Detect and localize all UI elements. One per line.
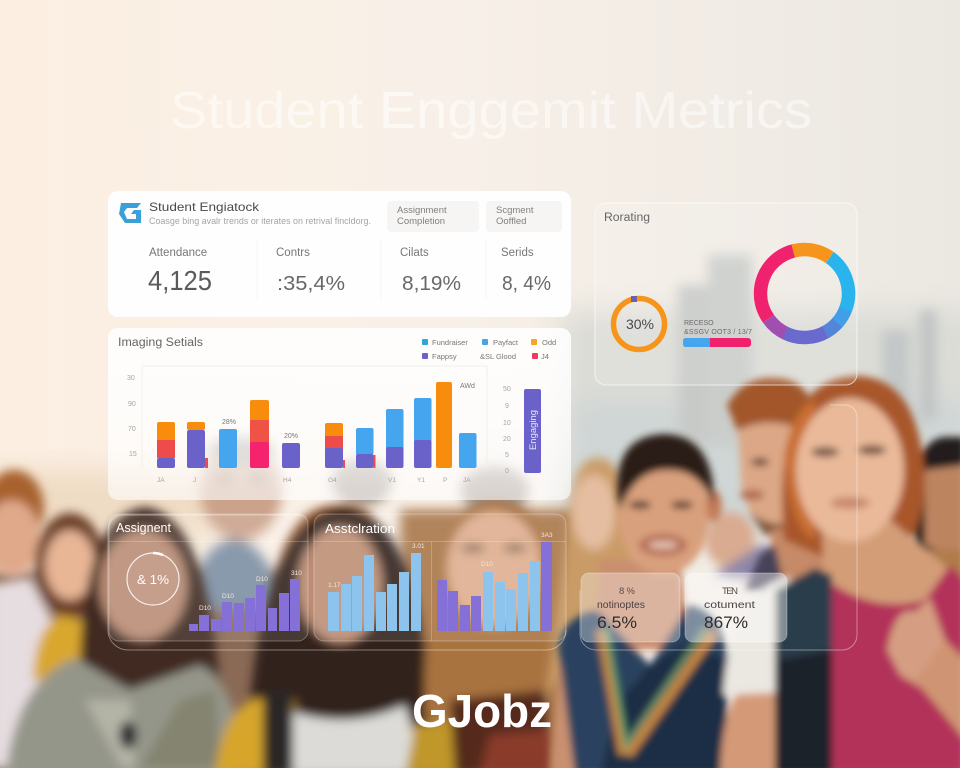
y axis labels: 70 (128, 426, 136, 433)
card: notinoptes: 6.5% (597, 613, 637, 632)
panel: stacked bar chart (108, 328, 571, 500)
x axis labels: G4 (328, 477, 337, 484)
card heading: Assignent (116, 520, 171, 535)
panel heading: Student Engiatock (149, 200, 260, 214)
side axis labels: 10 (503, 420, 511, 427)
y axis labels: 15 (129, 451, 137, 458)
card: cotument: TEN (722, 586, 738, 597)
bar value labels (222, 383, 475, 440)
x axis labels: JA (157, 477, 165, 484)
student brown hair (405, 500, 565, 768)
bar labels: D10 (199, 605, 211, 612)
student with yellow top (33, 513, 105, 680)
metric: serids: Serids (501, 247, 534, 259)
student far left (0, 470, 52, 768)
chip: segment outlined: Scgment (496, 205, 534, 216)
mixed bars (437, 542, 552, 631)
card: notinoptes: 8% (619, 586, 636, 597)
side bar (524, 389, 541, 473)
x axis labels: Y1 (417, 477, 425, 484)
metric: cilats: 8,19% (402, 273, 461, 295)
card: cotument: cotument (704, 599, 755, 611)
bars group two (325, 382, 476, 468)
legend: &SL Glood (480, 352, 516, 361)
metric: attendance (148, 247, 212, 296)
small donut 30% (614, 296, 664, 350)
x axis labels (157, 477, 471, 484)
metric: attendance: 4,125 (148, 265, 212, 296)
card heading: Asstclration (325, 521, 395, 536)
legend (422, 338, 556, 361)
card: notinoptes (581, 573, 680, 642)
metric: serids (501, 247, 551, 295)
metric: contrs: :35,4% (277, 273, 345, 295)
student centre (215, 505, 432, 768)
card: cotument (685, 573, 787, 642)
metric: serids: 8, 4% (502, 273, 551, 295)
x axis labels: J (193, 477, 196, 484)
y axis labels: 30 (127, 375, 135, 382)
metric: attendance: Attendance (149, 247, 207, 259)
chip: segment outlined (486, 201, 562, 232)
bar labels: D10 (222, 593, 234, 600)
legend: J4 (541, 352, 549, 361)
bar labels: D10 (256, 576, 268, 583)
chart heading: Imaging Setials (118, 337, 203, 349)
side axis labels: 50 (503, 386, 511, 393)
mini bar with caption: &SSGV OOT3 / 13/7 (684, 329, 752, 336)
bar value labels: 20% (284, 433, 298, 440)
panel subheading: Coasge bing avalr trends or iterates on retrival fincldorg. (149, 216, 371, 226)
panel: student engagement summary (108, 191, 571, 317)
x axis labels: JA (463, 477, 471, 484)
bar labels: 1.17 (328, 582, 341, 589)
bar labels: 3.01 (412, 543, 425, 550)
chip: assignment completion (387, 201, 479, 232)
student in jacket (5, 507, 245, 768)
x axis labels: V1 (388, 477, 396, 484)
side axis labels: 9 (505, 403, 509, 410)
photo: crowd of students (0, 376, 960, 768)
metric: cilats (400, 247, 461, 295)
side axis labels: 5 (505, 452, 509, 459)
y axis labels: 90 (128, 401, 136, 408)
progress ring (127, 553, 179, 605)
bar labels: 310 (291, 570, 302, 577)
chip: assignment completion: Completion (397, 216, 445, 227)
student on right (915, 437, 960, 595)
bars group one (157, 400, 300, 468)
metric: contrs (276, 247, 345, 295)
small student (705, 512, 790, 585)
small donut 30%: 30% (626, 316, 654, 332)
legend: Odd (542, 338, 556, 347)
side bar: Engaging (528, 410, 538, 450)
chip: segment outlined: Ooffled (496, 216, 526, 227)
card: cotument: 867% (704, 613, 748, 632)
student with lanyard (550, 434, 728, 768)
metric: cilats: Cilats (400, 247, 429, 259)
panel: metric cards outline (580, 405, 857, 650)
icon: logo (119, 203, 141, 223)
bar value labels: AWd (460, 383, 475, 390)
progress ring: & 1% (137, 572, 169, 587)
x axis labels: P (443, 477, 447, 484)
card: notinoptes: notinoptes (597, 599, 645, 611)
chip: assignment completion: Assignment (397, 205, 447, 216)
legend: Fappsy (432, 352, 457, 361)
metric: contrs: Contrs (276, 247, 310, 259)
card: association (314, 514, 566, 641)
y axis labels (127, 375, 137, 458)
bar labels (199, 570, 302, 612)
panel: rating donuts (595, 203, 866, 385)
blonde student (545, 458, 640, 700)
large donut (743, 232, 866, 355)
panel: assignment outline (108, 514, 566, 650)
title: Student Enggemit Metrics (170, 82, 812, 140)
student in pink shirt (720, 376, 960, 768)
x axis labels: H4 (283, 477, 292, 484)
bar value labels: 28% (222, 419, 236, 426)
student with red hair (727, 378, 840, 590)
mini bar with caption (683, 320, 752, 347)
side axis labels: 20 (503, 436, 511, 443)
mini bar with caption: RECESO (684, 320, 714, 327)
purple bars (189, 579, 300, 631)
legend: Payfact (493, 338, 519, 347)
card: assignment (109, 514, 308, 641)
bar labels: D10 (481, 561, 493, 568)
side axis labels (503, 386, 511, 475)
blue bars (328, 553, 421, 631)
legend: Fundraiser (432, 338, 468, 347)
man in back (190, 436, 285, 610)
bar labels (328, 532, 553, 589)
panel heading: Rorating (604, 212, 650, 224)
brand logo: GJobz (412, 685, 552, 737)
side axis labels: 0 (505, 468, 509, 475)
bar labels: 3A3 (541, 532, 553, 539)
